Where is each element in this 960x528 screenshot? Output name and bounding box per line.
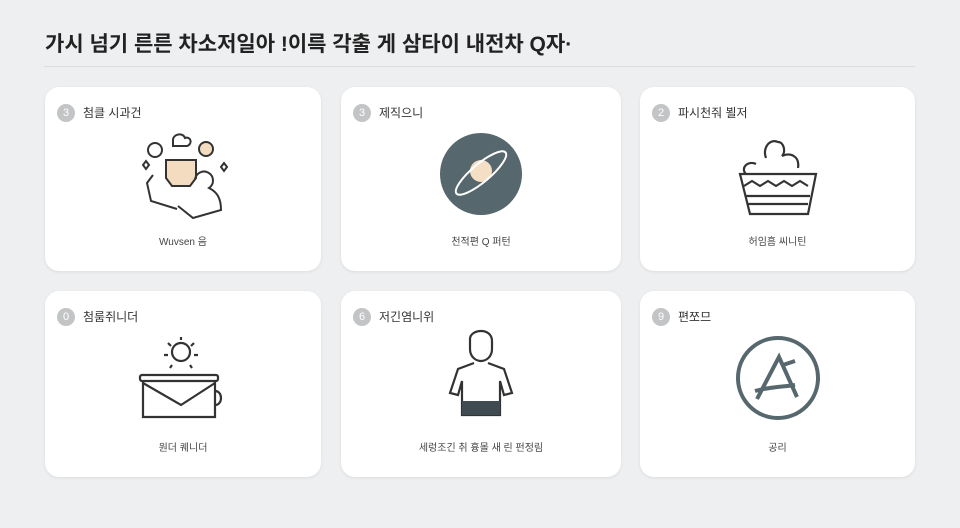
icon: triangle circle [736, 336, 820, 420]
caption 6: 공리 [768, 443, 787, 454]
panel: card 3 [640, 87, 915, 271]
caption 3: 허임흠 씨니틴 [748, 237, 806, 248]
caption 1: Wuvsen 음 [159, 237, 207, 248]
panel: card 2: 3 [359, 107, 365, 119]
label 4: 첨룸쥐니더 [83, 310, 138, 324]
label 1: 첨클 시과건 [83, 106, 142, 120]
title: 가시 넘기 른른 차소저일아 !이륵 각출 게 삼타이 내전차 Q자· [45, 33, 572, 56]
icon: person [448, 330, 514, 416]
panel: card 6: 9 [658, 311, 664, 323]
panel: card 4 [45, 291, 321, 477]
panel: card 1 [45, 87, 321, 271]
panel: card 5 [341, 291, 621, 477]
panel: card 4: 0 [63, 311, 69, 323]
label 5: 저긴염니위 [379, 310, 434, 324]
label 2: 제직으니 [379, 106, 423, 120]
panel: card 3: 2 [658, 107, 664, 119]
label 6: 편쪼므 [678, 310, 711, 324]
icon: person juggling [142, 133, 228, 220]
label 3: 파시천줘 뵐저 [678, 106, 748, 120]
panel: card 1: 3 [63, 107, 69, 119]
panel: card 6 [640, 291, 915, 477]
caption 5: 세렁조긴 취 흉몰 새 린 펀정림 [419, 443, 543, 454]
panel: card 5: 6 [359, 311, 365, 323]
icon: planet [440, 133, 522, 215]
panel: card 2 [341, 87, 621, 271]
icon: basket [738, 140, 818, 216]
caption 2: 천적편 Q 퍼턴 [451, 237, 511, 248]
icon: sun and box [138, 337, 222, 418]
caption 4: 원더 퀘니더 [159, 443, 207, 454]
